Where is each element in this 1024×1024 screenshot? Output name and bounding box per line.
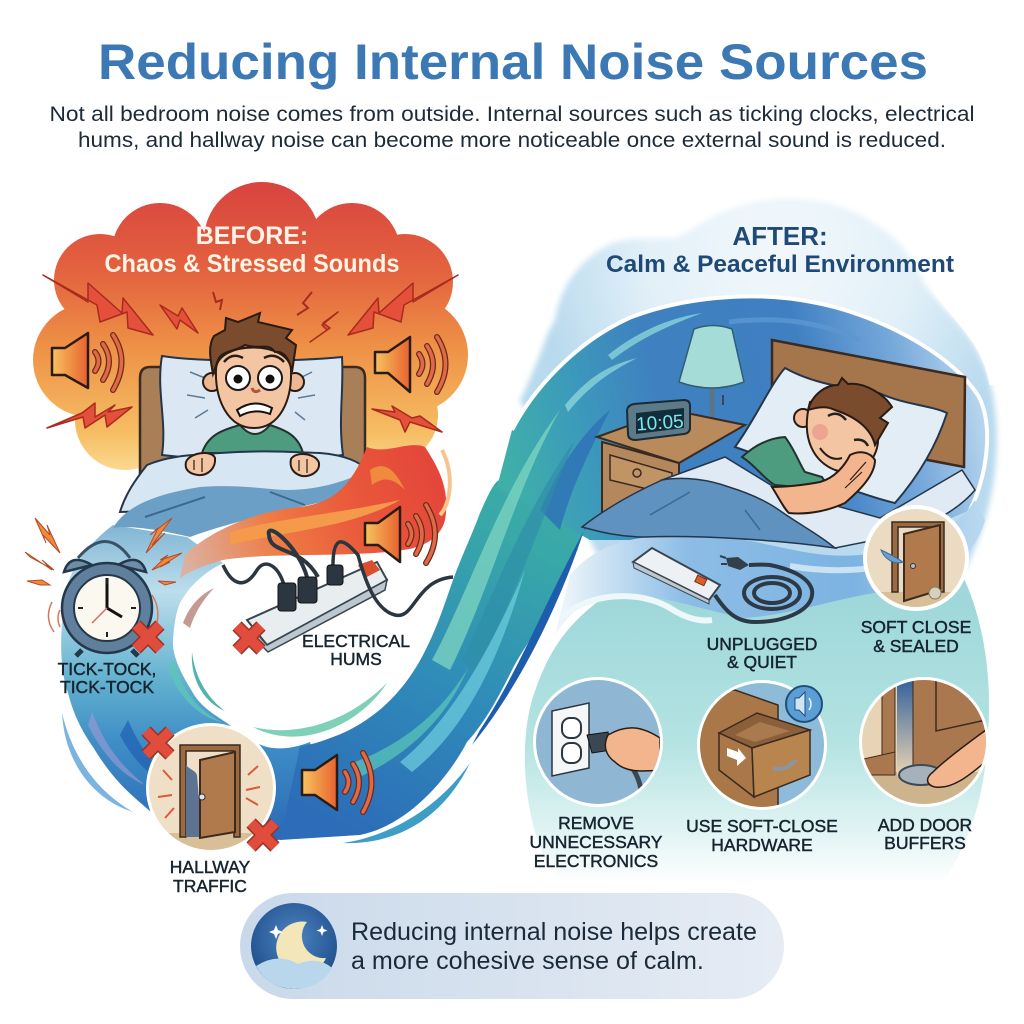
pillow — [735, 368, 947, 503]
label: tick tock — [58, 659, 156, 697]
lower wave — [555, 500, 985, 635]
icon: red cross clock — [136, 625, 160, 649]
label: electrical hums — [302, 631, 410, 669]
icon: moon — [251, 903, 337, 989]
sheet — [120, 451, 368, 512]
lightning bolts — [43, 275, 458, 432]
icon: soft-close drawer — [697, 680, 827, 810]
label: unplugged and quiet — [707, 634, 817, 672]
nightstand — [602, 442, 679, 520]
label: hallway traffic: HALLWAY — [170, 857, 251, 877]
icon: speaker left — [52, 333, 122, 390]
label: electrical hums: ELECTRICAL — [302, 631, 410, 651]
label: electrical hums: HUMS — [330, 649, 382, 669]
calm bedroom scene — [582, 326, 975, 548]
icon: alarm clock — [25, 518, 182, 656]
digital clock — [627, 400, 690, 440]
label: unplugged and quiet: & QUIET — [727, 652, 797, 672]
icon: power strip before — [223, 531, 453, 652]
arm and hands — [772, 452, 875, 513]
blanket — [113, 470, 367, 537]
callout — [240, 893, 784, 999]
heading: before: Chaos & Stressed Sounds — [104, 250, 400, 278]
icon: speaker bottom — [302, 753, 372, 812]
intro text: Not all bedroom noise comes from outside. Internal sources such as ticking clocks, electrical — [50, 102, 974, 126]
heading: before — [104, 222, 400, 278]
stressed person in bed — [113, 313, 368, 537]
icon: speaker right — [375, 337, 446, 392]
label: hallway traffic — [170, 857, 251, 896]
label: soft-close hardware: HARDWARE — [711, 835, 813, 855]
panel: after calm background — [520, 199, 997, 880]
blanket — [582, 478, 835, 548]
icon: soft close door — [863, 505, 969, 612]
heading: after: AFTER: — [732, 221, 828, 251]
bedding pale — [662, 457, 975, 548]
label: remove electronics: UNNECESSARY — [530, 832, 663, 852]
small stress marks — [213, 292, 312, 315]
label: tick tock: TICK-TOCK — [60, 677, 154, 697]
icon: red cross strip — [237, 626, 261, 650]
label: hallway traffic: TRAFFIC — [173, 876, 247, 896]
hands — [186, 453, 319, 476]
headboard — [140, 367, 365, 478]
digital clock: 10:05 — [636, 411, 684, 436]
label: unplugged and quiet: UNPLUGGED — [707, 634, 817, 654]
label: soft-close hardware: USE SOFT-CLOSE — [686, 816, 838, 836]
intro text: hums, and hallway noise can become more noticeable once external sound is reduced. — [78, 128, 946, 152]
heading: after: Calm & Peaceful Environment — [606, 251, 954, 278]
pillows — [160, 356, 343, 460]
hair — [210, 313, 296, 374]
label: door buffers: BUFFERS — [884, 833, 966, 853]
label: tick tock: TICK-TOCK, — [58, 659, 156, 679]
headboard — [772, 340, 965, 467]
icon: hallway door — [146, 723, 276, 853]
hair — [808, 378, 892, 445]
label: soft-close hardware — [686, 816, 838, 855]
icon: door buffer — [859, 677, 990, 812]
panel: before stress cloud — [33, 182, 468, 470]
shirt — [202, 425, 303, 453]
head — [794, 409, 812, 427]
head — [203, 373, 221, 391]
icon: unplugged power strip — [633, 548, 812, 622]
label: remove electronics: REMOVE — [558, 813, 634, 833]
flowing ribbon — [61, 440, 600, 842]
callout: Reducing internal noise helps create — [351, 918, 757, 946]
ribbon streaks — [62, 410, 590, 843]
lamp — [710, 387, 714, 423]
label: soft close sealed: & SEALED — [873, 636, 959, 656]
icon: outlet and plug — [533, 677, 663, 807]
dome behind the bed — [497, 296, 987, 540]
fire trail — [180, 445, 450, 578]
title: Reducing Internal Noise Sources — [98, 34, 928, 90]
heading: after — [606, 221, 954, 278]
label: soft close sealed: SOFT CLOSE — [861, 617, 971, 637]
label: door buffers — [878, 815, 972, 853]
callout: a more cohesive sense of calm. — [351, 947, 704, 975]
shirt — [742, 437, 830, 490]
intro text — [50, 102, 974, 152]
label: door buffers: ADD DOOR — [878, 815, 972, 835]
label: remove electronics — [530, 813, 663, 871]
heading: before: BEFORE: — [196, 222, 308, 250]
icon: red crosses hallway — [146, 731, 275, 847]
label: soft close sealed — [861, 617, 971, 656]
icon: speaker strip — [365, 505, 435, 563]
label: remove electronics: ELECTRONICS — [534, 851, 658, 871]
